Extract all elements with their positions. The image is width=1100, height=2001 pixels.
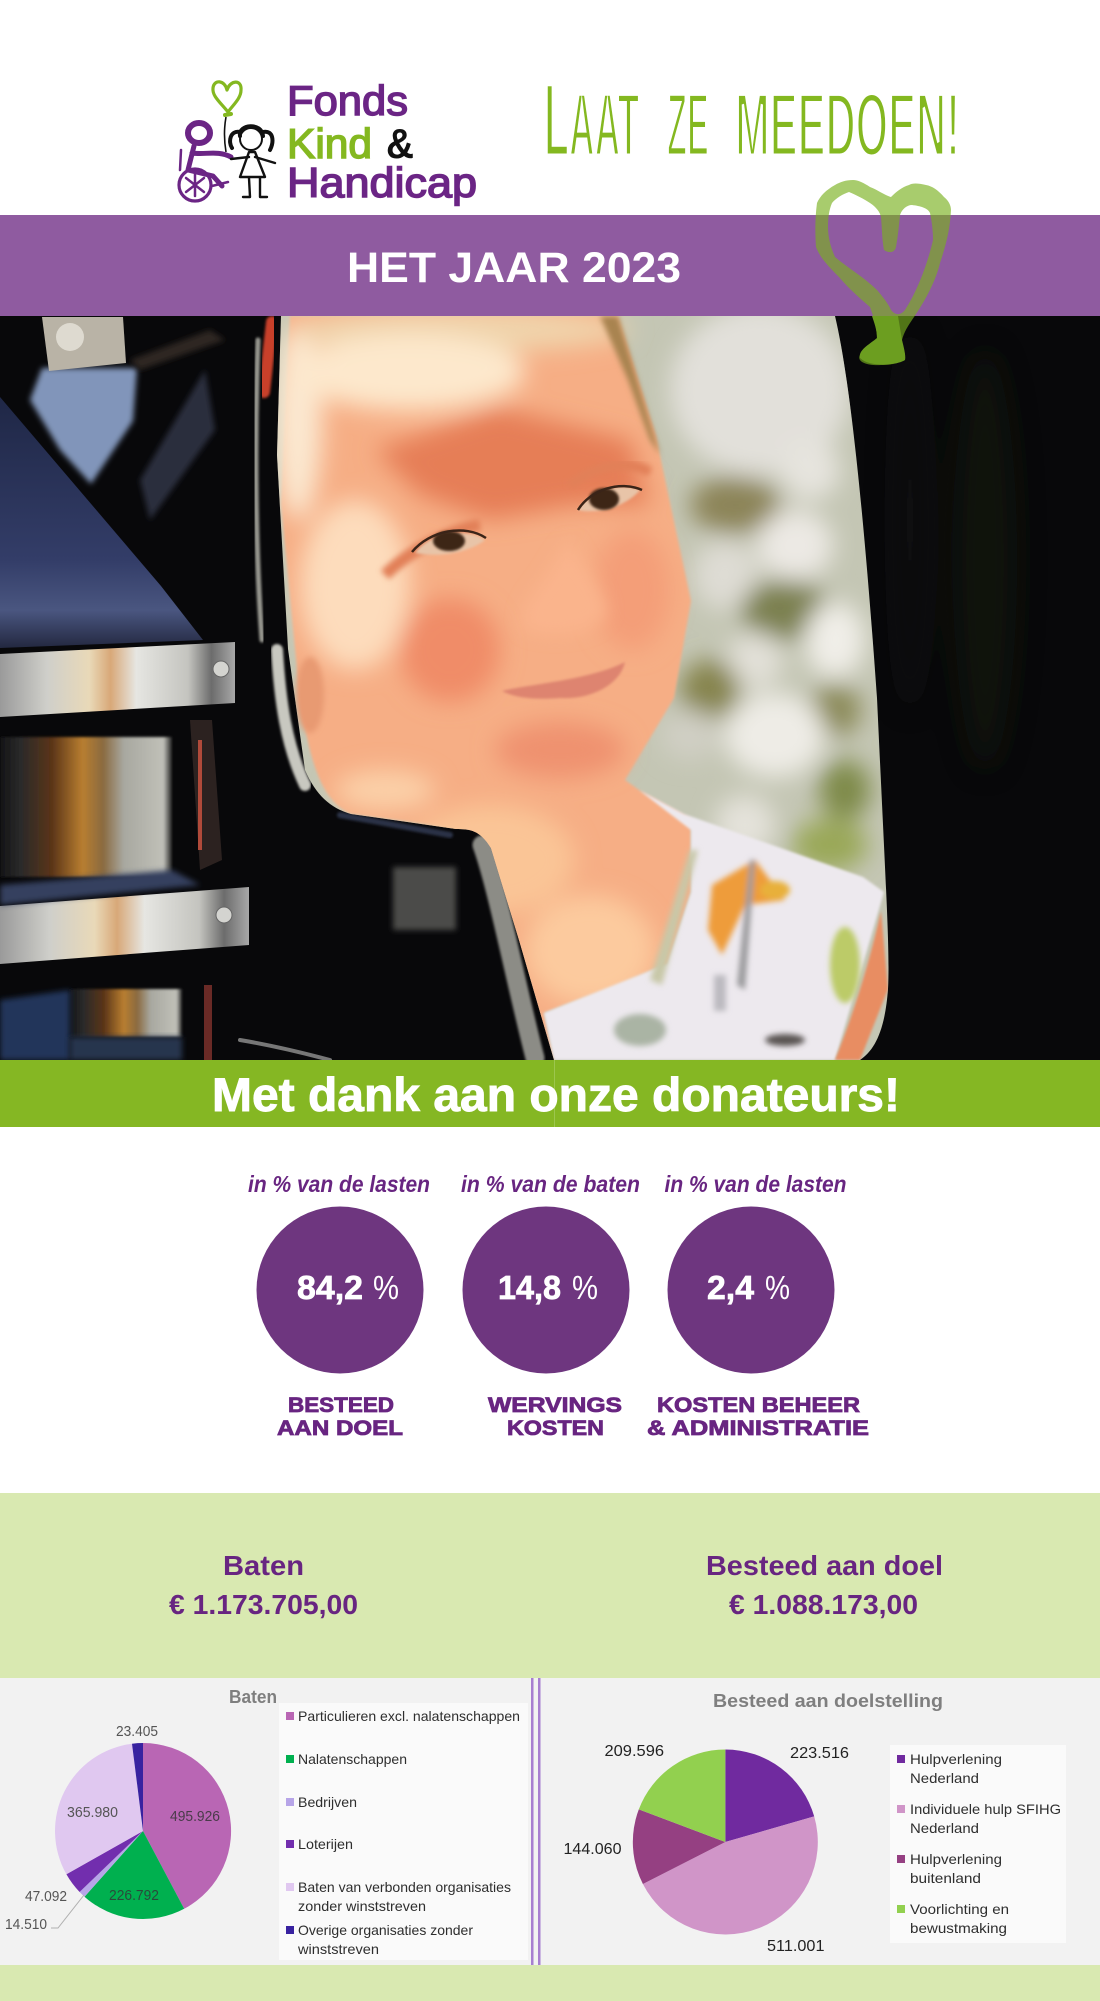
legend: doelstelling: bewustmaking: [910, 1920, 1007, 1936]
photo: hair and highlights: [274, 308, 670, 1005]
photo: smiling child behind black vehicle frame: [0, 305, 1100, 1060]
photo: left eye: [385, 525, 486, 575]
leader line: [51, 1895, 84, 1928]
panel: baten pie chart: [5, 1687, 528, 1960]
kpi: kosten beheer en administratie: & ADMINISTRATIE: [647, 1417, 869, 1440]
pie value labels: [564, 1743, 849, 1955]
legend: baten: Particulieren excl. nalatenschappen: [298, 1708, 520, 1724]
chart title: Baten: [229, 1687, 277, 1707]
photo: skin of face and neck: [281, 316, 691, 1060]
photo: bolt plate and blue reflection: [30, 317, 225, 520]
legend: doelstelling: Nederland: [910, 1820, 979, 1836]
kpi: kosten beheer en administratie: KOSTEN BEHEER: [657, 1394, 860, 1417]
icon: balloon string: [224, 117, 226, 152]
logo word: Handicap: Handicap: [287, 159, 477, 206]
banner: met dank aan onze donateurs: [0, 1060, 1100, 1127]
pie value labels: 365.980: [67, 1805, 118, 1821]
kpi: besteed aan doel: AAN DOEL: [277, 1417, 403, 1440]
legend: doelstelling: buitenland: [910, 1870, 981, 1886]
tagline: Laat ze meedoen!: LAAT: [544, 61, 639, 178]
legend: baten: zonder winststreven: [298, 1898, 426, 1914]
kpi: kosten beheer en administratie: in % van de lasten: [664, 1171, 846, 1197]
panel: charts background: [0, 1678, 1100, 1965]
legend: doelstelling: Individuele hulp SFIHG: [910, 1801, 1061, 1817]
icon: child in wheelchair: [179, 123, 231, 201]
logo word: Fonds: Fonds: [287, 77, 408, 124]
banner heading: HET JAAR 2023: [347, 244, 681, 292]
kpi: wervingskosten: %: [572, 1269, 598, 1306]
legend: doelstelling: Nederland: [910, 1770, 979, 1786]
pie value labels: 14.510: [5, 1917, 47, 1933]
kpi: wervingskosten: in % van de baten: [461, 1171, 640, 1197]
total: besteed aan doel: Besteed aan doel: [706, 1550, 943, 1581]
total: besteed aan doel: [706, 1550, 943, 1620]
tagline: Laat ze meedoen!: [544, 61, 960, 178]
photo: dark blue cone: [0, 397, 203, 648]
pie value labels: 144.060: [564, 1841, 622, 1858]
pie value labels: 209.596: [604, 1743, 664, 1760]
kpi: besteed aan doel: [248, 1171, 430, 1440]
icon: heart balloon: [213, 82, 241, 115]
photo: ear shadow: [296, 657, 324, 733]
pie value labels: 495.926: [170, 1809, 220, 1825]
total: besteed aan doel: € 1.088.173,00: [729, 1589, 918, 1620]
banner: het jaar 2023: [0, 215, 1100, 316]
logo word: Kind: Kind: [287, 120, 372, 167]
legend: doelstelling: [890, 1745, 1066, 1943]
photo: nose: [566, 565, 606, 622]
heart lower blob on photo: [860, 316, 905, 365]
legend: baten: Baten van verbonden organisaties: [298, 1879, 511, 1895]
pie value labels: 47.092: [25, 1889, 67, 1905]
icon: large translucent green heart: [815, 180, 951, 365]
photo: right frame tone: [966, 390, 1004, 730]
photo: shirt print: [614, 850, 860, 1046]
kpi: kosten beheer en administratie: %: [765, 1269, 790, 1306]
tagline: Laat ze meedoen!: MEEDOEN!: [735, 75, 960, 177]
banner heading: Met dank aan onze donateurs!: [212, 1068, 900, 1121]
legend: doelstelling: Hulpverlening: [910, 1751, 1002, 1767]
pie value labels: 223.516: [790, 1745, 849, 1762]
legend: baten: [279, 1703, 528, 1960]
kpi: kosten beheer en administratie: [647, 1171, 869, 1440]
legend: baten: Loterijen: [298, 1836, 353, 1852]
pie value labels: 511.001: [767, 1938, 824, 1955]
tagline: Laat ze meedoen!: ZE: [667, 75, 709, 176]
photo: hair right edge: [600, 316, 660, 455]
chart title: Besteed aan doelstelling: [713, 1691, 943, 1711]
kpi: wervingskosten: WERVINGS: [488, 1394, 622, 1417]
legend: baten: Bedrijven: [298, 1794, 357, 1810]
legend: baten: Nalatenschappen: [298, 1751, 407, 1767]
legend: baten: Overige organisaties zonder: [298, 1922, 473, 1938]
legend: doelstelling: Hulpverlening: [910, 1851, 1002, 1867]
kpi: wervingskosten: KOSTEN: [507, 1417, 604, 1440]
kpi: besteed aan doel: 84,2: [297, 1269, 363, 1306]
kpi: besteed aan doel: BESTEED: [288, 1394, 394, 1417]
photo: chrome bands: [0, 642, 249, 964]
total: baten: € 1.173.705,00: [169, 1589, 358, 1620]
pie value labels: 226.792: [109, 1888, 159, 1904]
photo: black cylinder reflections: [0, 720, 222, 1060]
kpi: besteed aan doel: %: [373, 1269, 399, 1306]
kpi group: percentages: [248, 1171, 869, 1440]
kpi: besteed aan doel: in % van de lasten: [248, 1171, 430, 1197]
photo: window opening with foliage, child: [270, 305, 900, 1060]
photo: lips: [502, 662, 625, 699]
photo: glossy frame edge: [240, 322, 535, 1060]
panel: besteed aan doelstelling pie chart: [564, 1691, 1066, 1955]
kpi: wervingskosten: [461, 1171, 640, 1440]
legend: baten: winststreven: [297, 1941, 379, 1957]
kpi: wervingskosten: 14,8: [498, 1269, 561, 1306]
panel: totals band: [0, 1493, 1100, 2001]
pie: doelstelling slices: [633, 1750, 818, 1934]
pie value labels: 23.405: [116, 1724, 158, 1740]
photo: arm: [835, 911, 888, 1060]
pie value labels: [5, 1724, 220, 1933]
total: baten: Baten: [223, 1550, 304, 1581]
legend: doelstelling: Voorlichting en: [910, 1901, 1009, 1917]
logo word: ampersand: &: [386, 120, 414, 167]
photo: right eye: [570, 465, 650, 511]
kpi: kosten beheer en administratie: 2,4: [707, 1269, 755, 1306]
icon: girl: [230, 126, 275, 197]
photo: blurred foliage: [660, 305, 871, 871]
photo: shirt: [544, 790, 884, 1060]
logo: Fonds Kind & Handicap: [179, 77, 477, 206]
total: baten: [169, 1550, 358, 1620]
pie: baten slices: [55, 1743, 231, 1919]
